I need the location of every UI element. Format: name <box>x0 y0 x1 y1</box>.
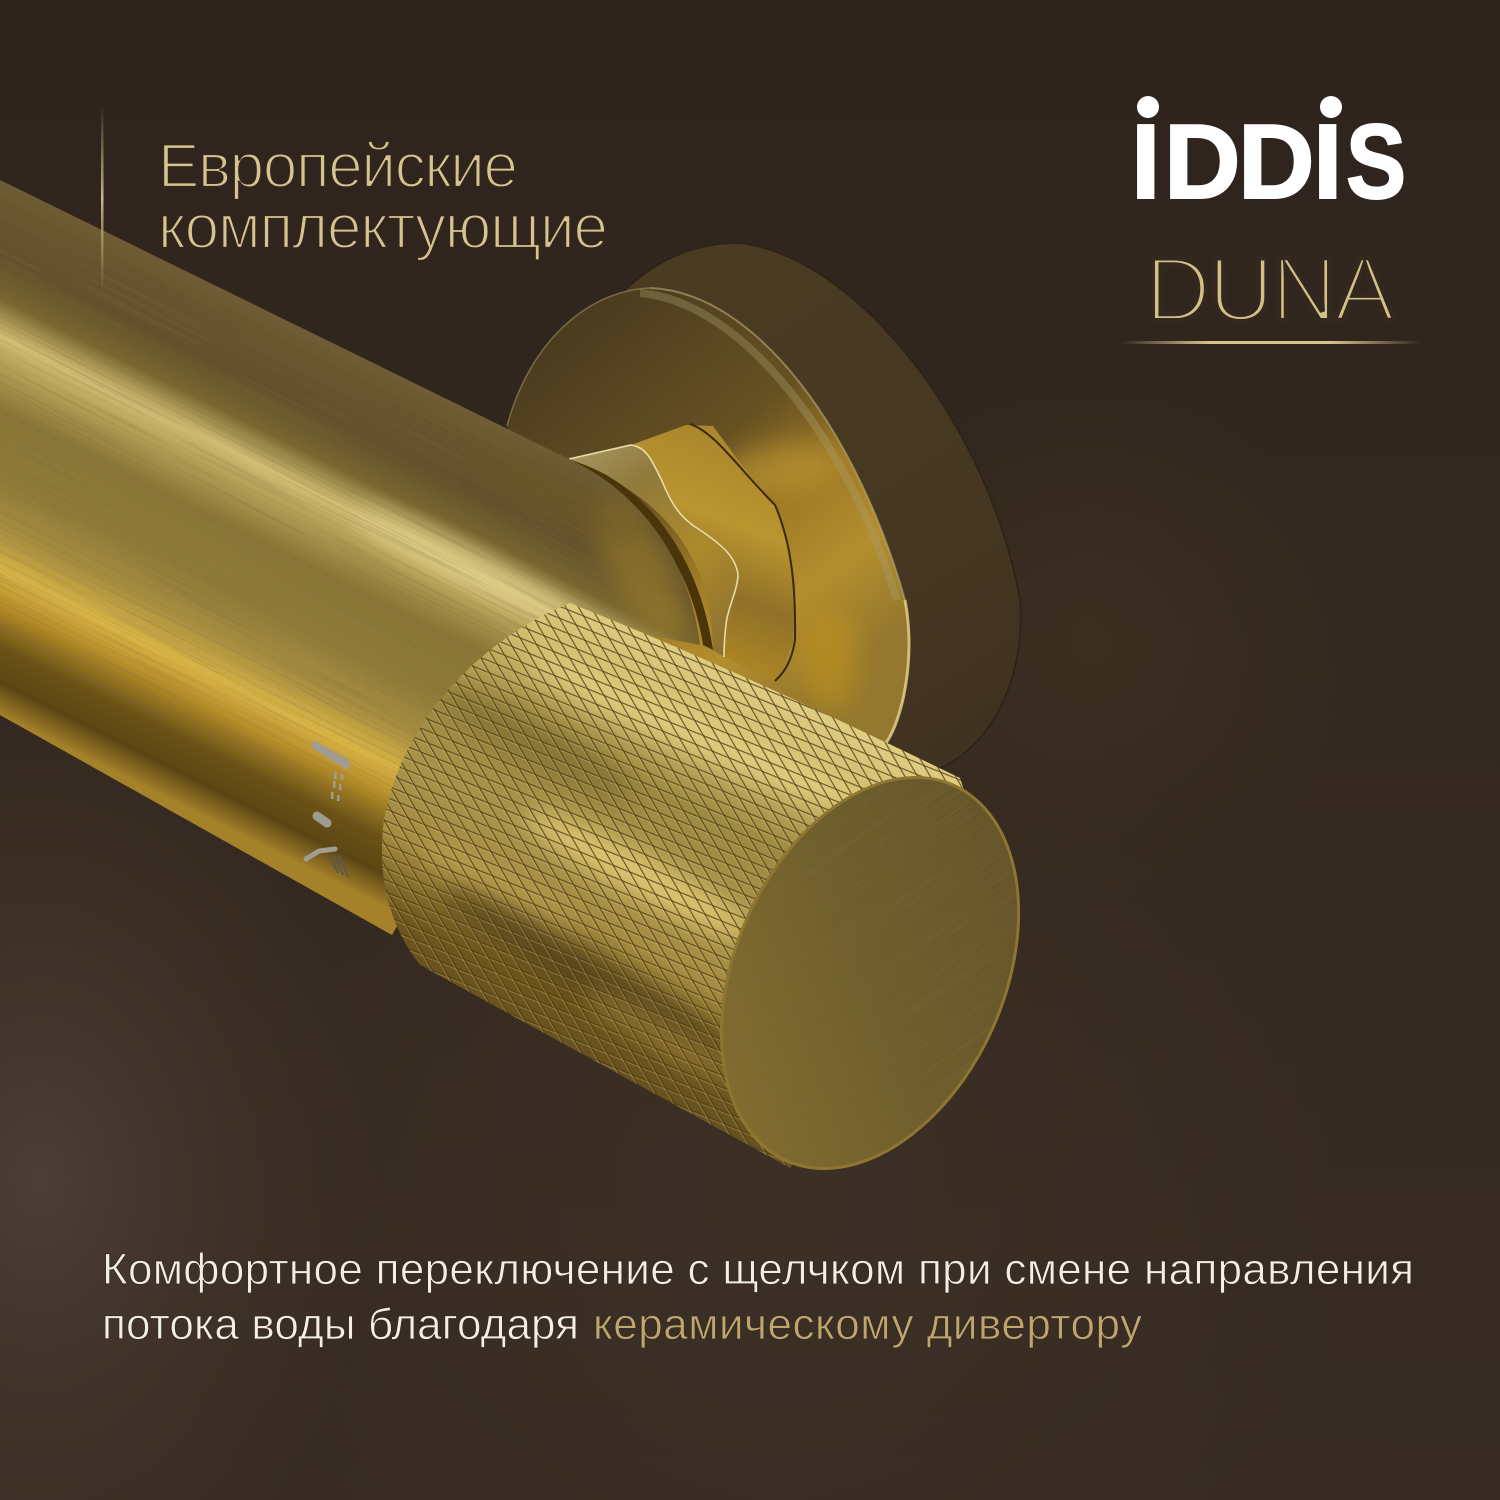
knurled handle <box>382 603 964 1168</box>
description text: Комфортное переключение с щелчком при смене направления <box>102 1245 1414 1294</box>
series name: DUNA: DUNA <box>1145 240 1395 340</box>
underline below series name <box>1120 341 1420 344</box>
nut groove line <box>690 424 795 681</box>
vertical accent line <box>101 105 104 292</box>
logo: IDDIS: S <box>1346 102 1406 221</box>
icon: overhead shower <box>306 849 348 877</box>
wall plate: outer back disc <box>620 243 1021 772</box>
description text: керамическому дивертору <box>593 1300 1142 1349</box>
description text <box>102 1245 1414 1349</box>
heading: European components <box>158 132 608 262</box>
heading: European components: Европейские <box>158 132 518 201</box>
description text: потока воды благодаря <box>102 1300 579 1349</box>
wall plate: front disc <box>507 288 909 743</box>
shiny collar <box>569 445 738 657</box>
knurled handle end cap <box>720 776 1020 1170</box>
icon: hand shower <box>311 741 350 801</box>
main shower body <box>0 180 700 935</box>
icon: centre position mark <box>317 816 327 823</box>
heading: European components: комплектующие <box>158 193 608 262</box>
logo: IDDIS: IDDI <box>1131 103 1342 221</box>
hex nut <box>631 425 796 681</box>
icon: diverter marks <box>306 741 350 877</box>
collar dark groove <box>569 459 713 650</box>
